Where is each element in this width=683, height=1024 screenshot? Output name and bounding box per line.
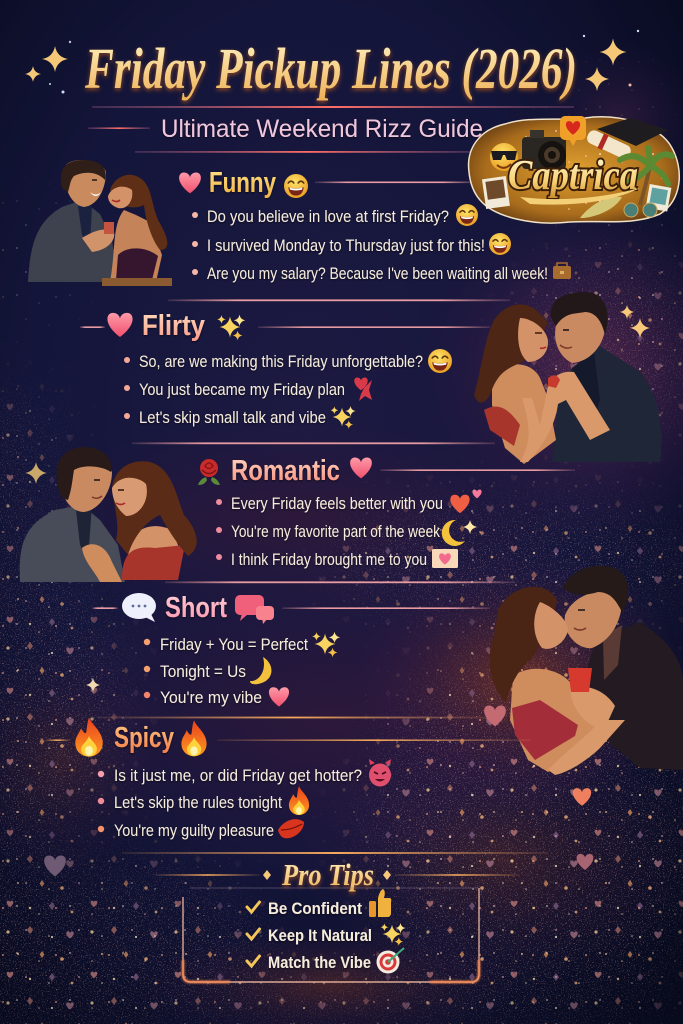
heading: pro tips: Pro Tips	[281, 857, 374, 892]
heading: pro tips	[155, 857, 520, 892]
title sparkles left	[25, 41, 71, 94]
icon: sunglasses emoji	[490, 143, 518, 171]
list: flirty: You just became my Friday plan	[139, 380, 345, 399]
rule	[122, 852, 549, 854]
list: spicy: You're my guilty pleasure	[114, 821, 274, 840]
section: romantic	[198, 455, 575, 569]
section: spicy	[45, 717, 531, 840]
list: funny: Do you believe in love at first Friday?	[207, 207, 449, 226]
list: pro tips	[247, 889, 406, 974]
title sparkles right	[583, 30, 639, 91]
icon: heart bubble	[560, 116, 586, 146]
couple illustration: short	[484, 566, 683, 775]
rule	[97, 717, 490, 718]
icon: glasses	[624, 203, 657, 217]
icon: bow heart	[354, 378, 372, 401]
heading: spicy	[45, 717, 531, 757]
list: short	[144, 632, 340, 707]
list: pro tips: Keep It Natural	[268, 926, 372, 945]
couple illustration: funny	[28, 160, 172, 286]
rule	[168, 299, 510, 301]
title rule	[92, 106, 574, 108]
heading: short	[92, 592, 490, 624]
icon: moon	[442, 520, 465, 546]
list: flirty: So, are we making this Friday unforgettable?	[139, 352, 423, 371]
list: short: You're my vibe	[160, 688, 262, 707]
logo: Captrica badge	[469, 116, 679, 223]
list: funny: I survived Monday to Thursday just for this!	[207, 236, 485, 255]
list: short: Friday + You = Perfect	[160, 635, 308, 654]
list: romantic	[216, 490, 482, 569]
rule	[132, 442, 495, 444]
icon: palm tree	[620, 148, 672, 205]
section: funny	[179, 167, 571, 283]
section: short	[92, 592, 490, 707]
list: romantic: You're my favorite part of the week	[231, 522, 440, 541]
icon: lips	[278, 819, 304, 838]
list: flirty	[124, 349, 452, 429]
icon: thumbs up	[369, 889, 391, 917]
list: spicy: Let's skip the rules tonight	[114, 793, 282, 812]
icon: briefcase	[553, 263, 571, 279]
list: pro tips: Match the Vibe	[268, 953, 371, 972]
list: funny	[192, 204, 571, 283]
section: flirty	[80, 310, 490, 429]
heading: funny	[179, 167, 475, 199]
heading: romantic: Romantic	[231, 455, 340, 487]
heading: funny: Funny	[209, 167, 276, 199]
list: spicy	[98, 759, 391, 840]
list: romantic: I think Friday brought me to you	[231, 550, 427, 569]
heading: flirty: Flirty	[142, 310, 205, 342]
icon: diploma	[585, 127, 633, 161]
icon: camera	[522, 130, 566, 169]
subtitle rule left	[88, 127, 150, 129]
couple illustration: flirty	[474, 292, 661, 464]
subtitle: Ultimate Weekend Rizz Guide	[161, 115, 483, 143]
icon: graduation cap	[597, 118, 668, 146]
rule	[165, 581, 515, 583]
list: funny: Are you my salary? Because I've been waiting all week!	[207, 264, 548, 283]
section: pro tips	[155, 857, 520, 982]
panel: pro tips box	[183, 888, 479, 982]
list: flirty: Let's skip small talk and vibe	[139, 408, 326, 427]
logo wordmark: Captrica	[508, 153, 638, 199]
icon: photo left	[482, 176, 510, 209]
icon: devil	[369, 759, 391, 786]
icon: speech bubble	[122, 593, 156, 622]
logo wordmark: Captrica	[508, 153, 638, 199]
icon: rose	[198, 459, 220, 485]
heading: romantic	[198, 455, 575, 487]
list: short: Tonight = Us	[160, 662, 246, 681]
subtitle rule lower	[135, 151, 480, 153]
icon: moon	[250, 657, 271, 684]
icon: pink bubbles	[235, 595, 274, 624]
list: romantic: Every Friday feels better with you	[231, 494, 443, 513]
list: pro tips: Be Confident	[268, 899, 362, 918]
list: spicy: Is it just me, or did Friday get hotter?	[114, 766, 362, 785]
heading: flirty	[80, 310, 490, 342]
icon: target	[376, 948, 404, 974]
heading: spicy: Spicy	[114, 722, 174, 754]
icon: feather	[580, 197, 622, 218]
icon: photo right	[646, 184, 671, 212]
couple illustration: romantic	[20, 447, 197, 582]
heading: short: Short	[165, 592, 227, 624]
icon: envelope	[432, 549, 458, 568]
